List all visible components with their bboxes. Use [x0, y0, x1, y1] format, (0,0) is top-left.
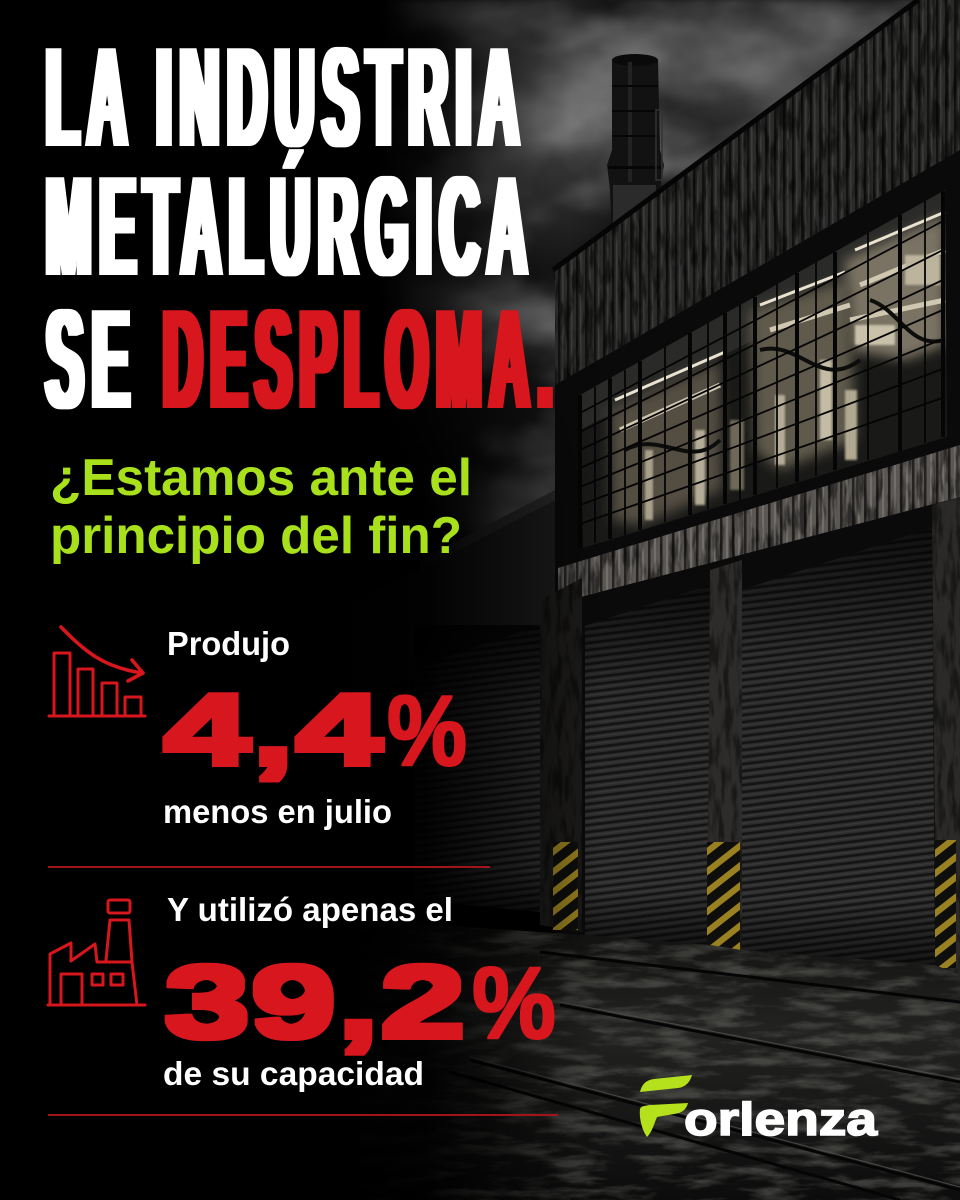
- roller shutter: centre: [585, 585, 710, 945]
- label: Y utilizó apenas el: Y utilizó apenas el: [167, 891, 453, 928]
- label: menos en julio: menos en julio: [163, 793, 392, 830]
- stat block: capacity: [48, 891, 556, 1092]
- dark wall behind windows and shutters: [555, 150, 960, 975]
- window mullions: [580, 191, 945, 548]
- subtitle: [50, 448, 472, 564]
- title: SE: [46, 280, 138, 439]
- subtitle line 2: principio del fin?: [50, 506, 462, 564]
- concrete columns with hazard stripes: [540, 497, 960, 977]
- icon: factory: [48, 900, 145, 1005]
- number: 4,4: 4,4: [163, 674, 384, 786]
- percent sign: %: [387, 675, 467, 787]
- logo: Forlenza: [640, 1075, 877, 1145]
- divider: [48, 1114, 558, 1116]
- left wing of the building: [340, 490, 555, 912]
- background photo: abandoned factory: [398, 0, 960, 1200]
- logo wordmark: orlenza: [684, 1093, 877, 1145]
- roller shutter: right: [742, 528, 935, 965]
- rusty corrugated band: [558, 445, 960, 603]
- logo mark: green F leaves: [640, 1075, 692, 1137]
- stormy sky: [380, 0, 960, 620]
- stat block: production: [49, 625, 467, 830]
- number: 39,2: 39,2: [164, 945, 466, 1059]
- title: [46, 18, 561, 439]
- icon: falling bar chart: [49, 627, 145, 716]
- subtitle line 1: ¿Estamos ante el: [50, 448, 472, 506]
- chimney: [607, 54, 664, 240]
- wet ground with rails: [437, 928, 960, 1200]
- percent sign: %: [472, 946, 556, 1060]
- fade to black behind the copy: [340, 429, 584, 1200]
- divider: [48, 866, 490, 868]
- factory windows: [580, 190, 947, 548]
- label: Produjo: Produjo: [167, 625, 290, 662]
- label: de su capacidad: de su capacidad: [163, 1055, 424, 1092]
- upper corrugated fascia: [553, 0, 960, 385]
